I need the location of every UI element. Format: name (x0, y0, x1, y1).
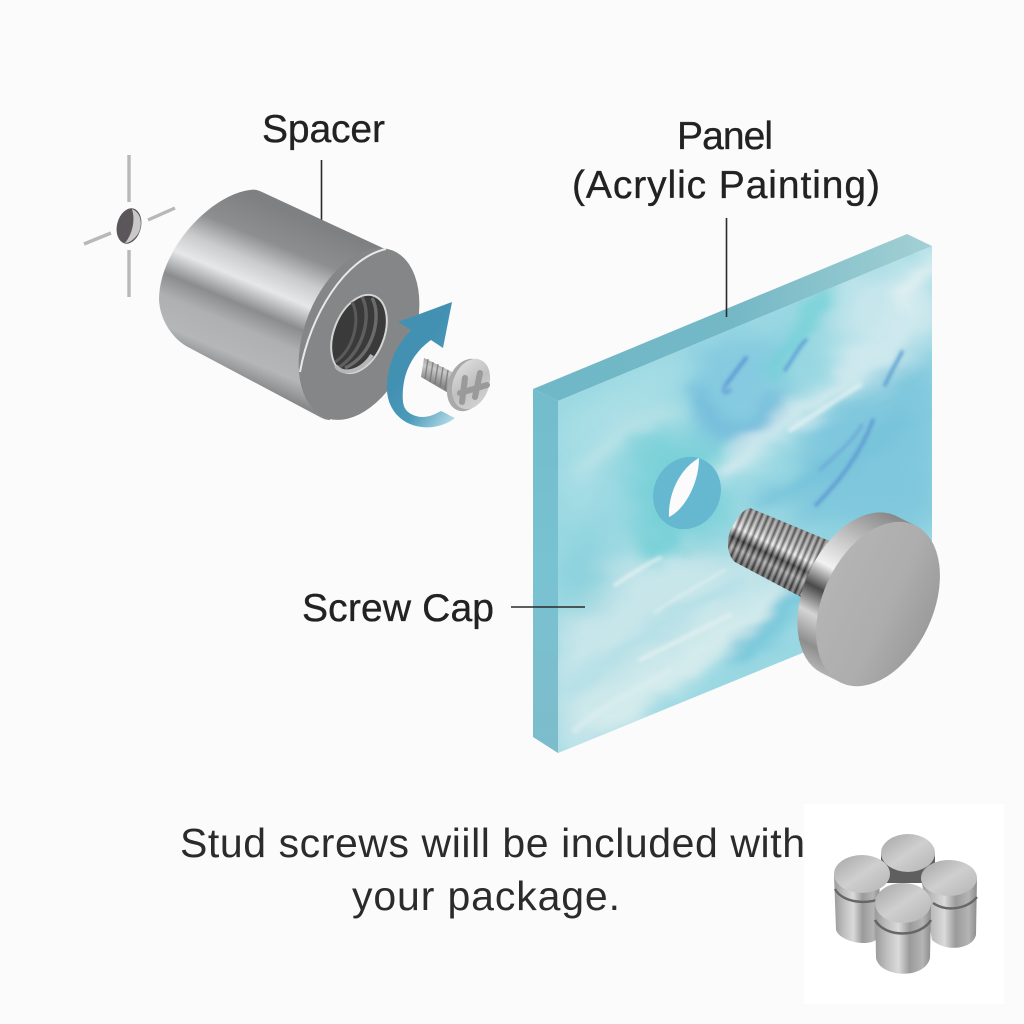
spacer cylinder (159, 190, 443, 438)
leader line: Panel (726, 218, 728, 317)
stud neck (800, 540, 845, 610)
leader line: Screw Cap (511, 606, 585, 608)
threaded stud (728, 508, 845, 610)
right spacer (921, 860, 977, 948)
label: Spacer: Spacer (262, 108, 385, 151)
stud thread (728, 508, 832, 598)
wall mark with crosshair (84, 155, 175, 297)
panel hole (640, 445, 734, 541)
screw cap disc (791, 502, 965, 706)
back spacer (881, 834, 935, 883)
front spacer (875, 883, 931, 974)
label: Panel (Acrylic Painting): (Acrylic Painting) (572, 164, 880, 207)
small screw (421, 353, 497, 417)
label: Screw Cap: Screw Cap (302, 587, 494, 630)
package note: your package. (352, 873, 620, 919)
cap face (791, 502, 965, 706)
cap rim (797, 512, 915, 683)
acrylic panel (533, 230, 940, 770)
leader line: Spacer (320, 160, 322, 237)
left spacer (834, 855, 890, 943)
product photo: four spacers (804, 804, 1004, 1004)
package note: Stud screws wiill be included with (180, 820, 805, 866)
panel top edge (533, 234, 932, 401)
threaded hole (320, 287, 398, 381)
painted panel face (558, 246, 932, 753)
label: Panel (Acrylic Painting): Panel (677, 115, 773, 158)
spacer front face (275, 230, 443, 438)
panel left edge (533, 389, 558, 753)
rotation arrow (387, 302, 455, 427)
